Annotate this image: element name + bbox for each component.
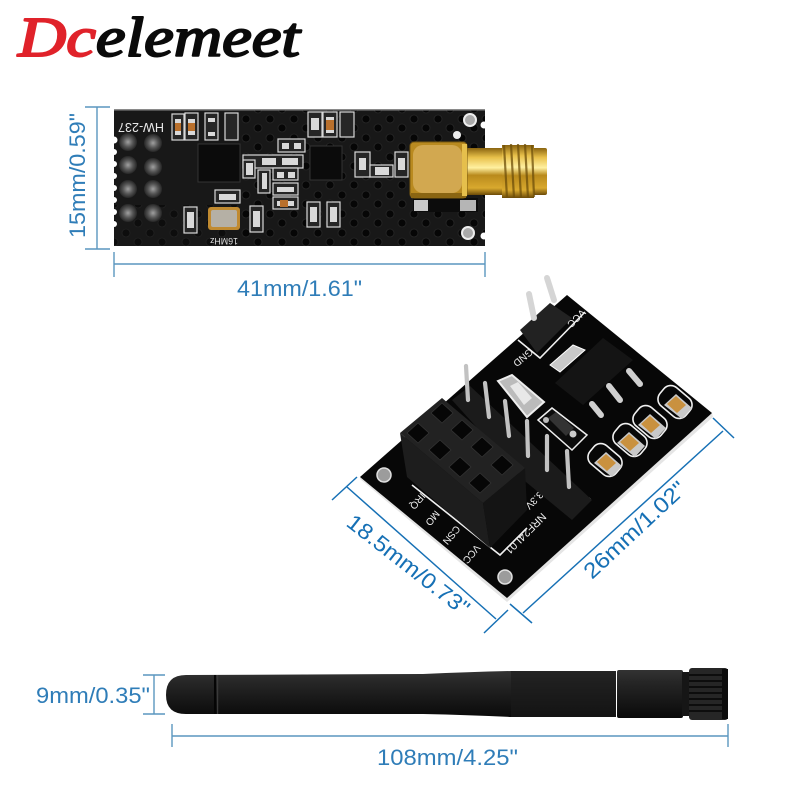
silkscreen labels: GND [511,346,535,368]
antenna base [617,670,683,718]
SMD components [172,112,408,233]
silkscreen labels: 3.3V [522,489,545,511]
silkscreen labels: CSN [440,523,462,546]
tip [532,148,547,195]
LED [498,375,544,417]
dimension: 108mm/4.25": 108mm/4.25" [377,745,518,770]
notches [480,122,488,240]
antenna [166,668,728,720]
8-hole female socket [400,398,527,548]
logo: Dcelemeet: Dcelemeet [17,7,302,69]
silkscreen outlines [412,312,696,555]
dimension: 26mm/1.02": 26mm/1.02" [578,476,691,584]
dimension: 18.5mm/0.73" [332,477,508,633]
dimension: 41mm/1.61" width: 41mm/1.61" [237,276,362,301]
chip U1 [198,144,240,182]
header pins [119,133,162,222]
silkscreen labels: VCC [564,306,587,329]
dimension: 9mm/0.35" [36,675,165,714]
mounting holes [453,114,476,239]
knurled nut [682,668,728,720]
adapter board with socket [360,278,713,602]
silkscreen: HW-237: HW-237 [118,120,164,135]
capacitors [594,394,692,477]
dimension: 9mm/0.35": 9mm/0.35" [36,683,150,708]
board mounting holes [377,468,512,584]
dimension: 26mm/1.02" [510,418,734,623]
dimension: 15mm/0.59" height: 15mm/0.59" [65,113,90,238]
voltage regulator [550,338,640,415]
resistor [538,408,587,450]
top module: nRF24L01 PA LNA board [110,109,488,246]
silkscreen labels: VCC [460,542,482,565]
silkscreen labels: NRF24L01 [502,510,548,556]
silkscreen labels: IRQ [407,490,427,511]
top 2-pin header [520,278,572,353]
barrel [466,148,503,195]
crystal 16MHz [208,207,240,230]
chip U2 [310,146,342,180]
silkscreen labels: MO [422,508,441,527]
thread [502,144,534,198]
body [410,142,467,198]
6-pin header [452,366,592,520]
dimension: 18.5mm/0.73": 18.5mm/0.73" [342,509,475,621]
silkscreen labels [407,306,587,565]
silkscreen: 16MHz: 16MHz [210,236,238,246]
SMA right-angle gold connector [410,142,547,212]
